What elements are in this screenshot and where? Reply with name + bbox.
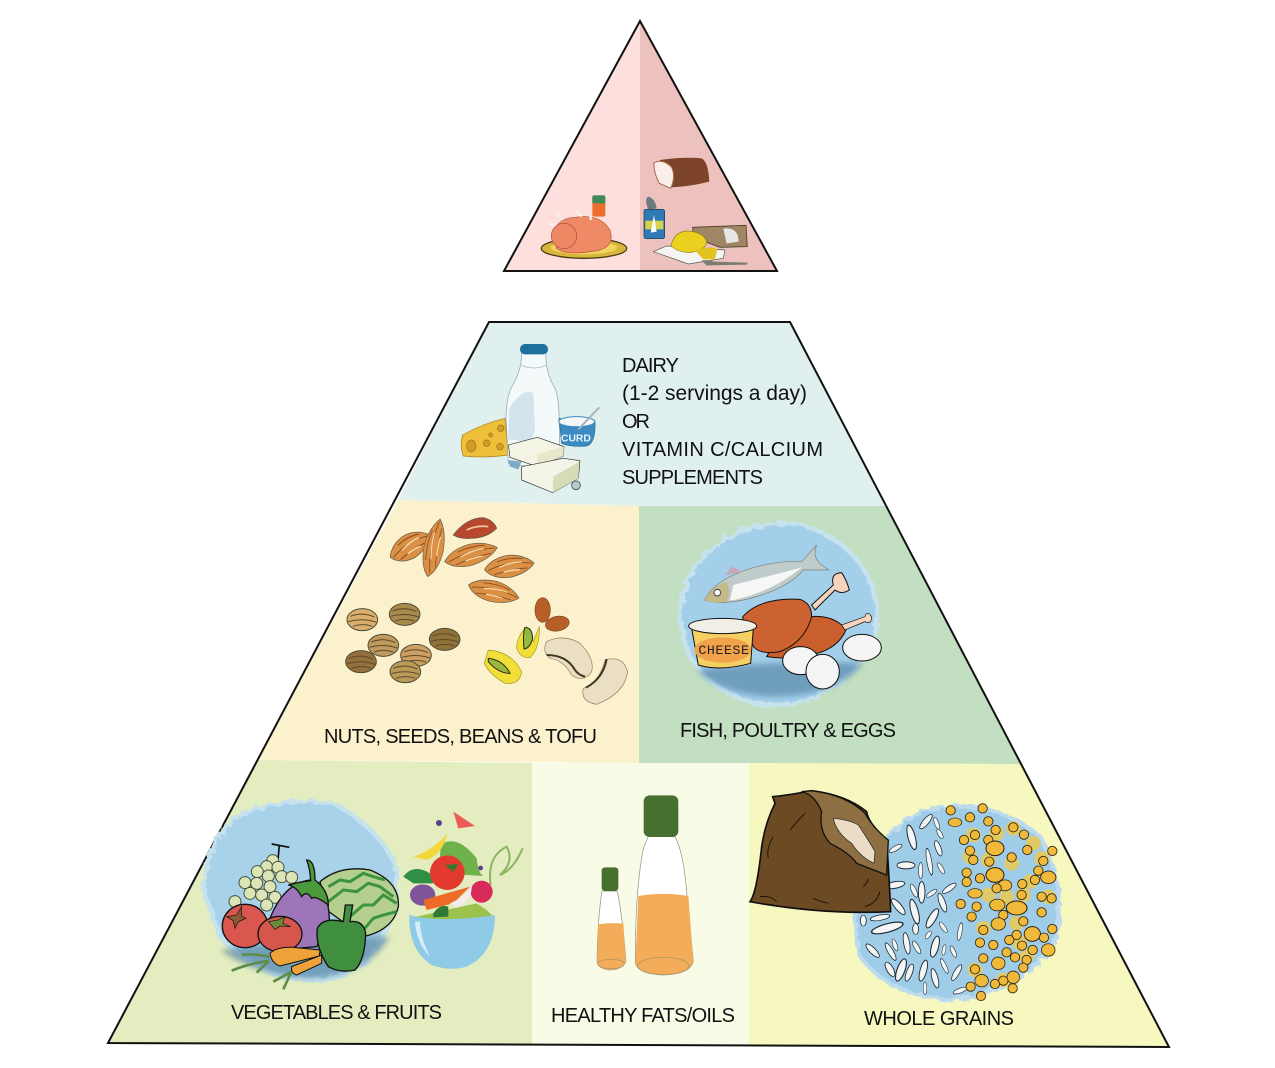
drumsticks <box>767 616 847 658</box>
cheese tub: CHEESE <box>698 644 749 659</box>
watermelon <box>320 869 398 937</box>
icon: roast chicken on plate <box>541 212 627 258</box>
top pyramid: foods to limit <box>504 21 777 271</box>
icon: grains sack with rice and lentils <box>750 791 1059 1001</box>
text: dairy label: DAIRY <box>622 355 679 377</box>
large bottle <box>635 795 693 975</box>
sack <box>750 791 891 912</box>
grapes <box>229 844 298 911</box>
icon: butter and box <box>653 225 747 265</box>
text: dairy label: SUPPLEMENTS <box>622 467 763 489</box>
icon: oil bottles <box>597 795 693 975</box>
panel: top right rose section <box>640 21 777 271</box>
icon: bread loaf <box>654 158 709 188</box>
text: dairy label: (1-2 servings a day) <box>622 382 807 405</box>
pistachios <box>484 627 539 684</box>
lentil halos <box>963 821 1056 987</box>
panel: fish, poultry and eggs <box>639 506 1022 764</box>
text: nuts label: NUTS, SEEDS, BEANS & TOFU <box>324 726 597 748</box>
blue background <box>855 807 1059 1000</box>
panel: dairy <box>398 322 887 506</box>
almonds <box>384 517 535 610</box>
text: fish label: FISH, POULTRY & EGGS <box>680 720 896 742</box>
seeds <box>346 603 460 683</box>
icon: vegetables group <box>203 801 398 989</box>
eggs <box>783 634 881 689</box>
blue background <box>680 523 877 705</box>
icon: fish, poultry, cheese and eggs <box>680 523 881 705</box>
beans <box>545 638 628 704</box>
top pyramid outline <box>504 21 777 271</box>
fish <box>704 545 829 602</box>
tomatoes <box>222 904 302 952</box>
small nuts <box>535 598 570 633</box>
panel: nuts, seeds, beans and tofu <box>258 500 639 763</box>
text: dairy label: VITAMIN C/CALCIUM <box>622 439 823 461</box>
icon: small jar <box>592 195 605 217</box>
text: whole grains label: WHOLE GRAINS <box>864 1008 1014 1030</box>
eggplant <box>269 860 329 950</box>
panel: vegetables and fruits <box>108 760 532 1044</box>
icon: dairy group: CURD <box>561 434 591 445</box>
text: dairy label: OR <box>622 411 650 433</box>
panel: whole grains <box>749 763 1169 1047</box>
bottom pyramid <box>108 322 1169 1047</box>
panel: healthy fats and oils <box>532 763 749 1045</box>
pyramid outline <box>108 322 1169 1047</box>
carrots <box>232 947 322 989</box>
small bottle <box>597 867 626 970</box>
icon: nuts, seeds and beans <box>346 517 628 704</box>
rice grains <box>860 813 968 995</box>
icon: dairy group <box>461 344 599 493</box>
text: dairy label <box>622 355 823 489</box>
panel: top left pink section <box>504 21 640 271</box>
cheese tub <box>689 618 757 668</box>
blue background <box>203 801 397 980</box>
icon: salad bowl <box>403 812 523 969</box>
text: vegetables label: VEGETABLES & FRUITS <box>231 1002 442 1024</box>
lentils <box>946 804 1057 1001</box>
text: fats label: HEALTHY FATS/OILS <box>551 1005 735 1027</box>
pepper <box>317 905 366 971</box>
icon: milk can <box>644 197 665 239</box>
